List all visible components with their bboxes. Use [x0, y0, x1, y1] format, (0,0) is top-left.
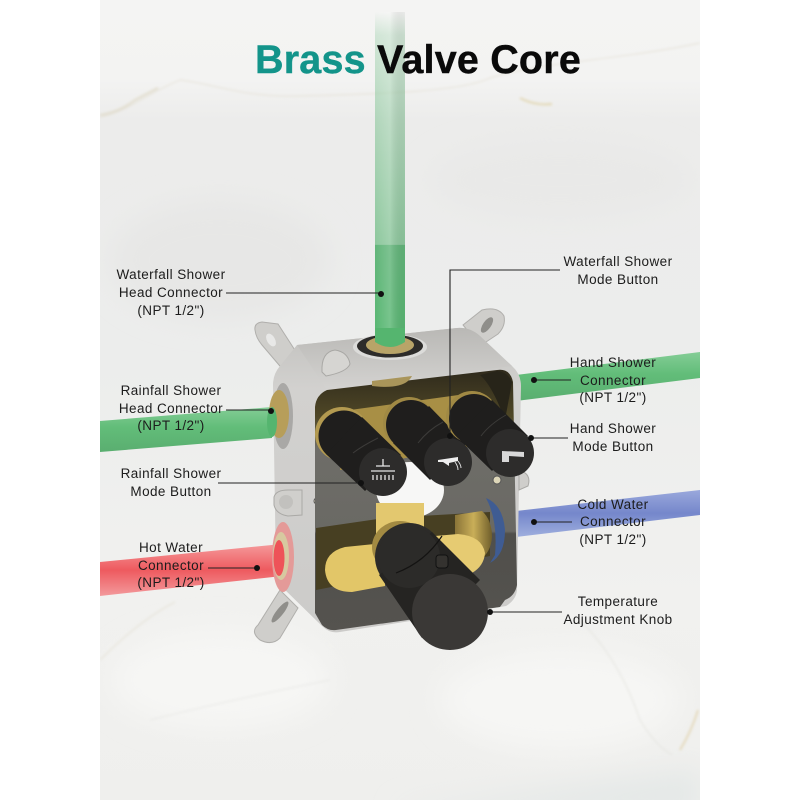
callout: hand shower mode button: Mode Button: [572, 439, 654, 454]
valve box: [254, 309, 534, 650]
white opening: [376, 462, 444, 518]
blue pipe: cold water: [516, 490, 700, 537]
callout: hot water connector: (NPT 1/2"): [137, 575, 205, 590]
callout: rainfall shower head connector: Head Connector: [119, 401, 223, 416]
callout: rainfall shower mode button: Rainfall Shower: [121, 466, 222, 481]
callout: waterfall shower head connector: [116, 267, 384, 318]
callout: waterfall shower mode button: Mode Button: [577, 272, 659, 287]
title: Brass Valve Core: [255, 38, 581, 82]
callout: temperature adjustment knob: Temperature: [578, 594, 658, 609]
callout: hand shower connector: Hand Shower: [570, 355, 656, 370]
red pipe: hot water: [100, 544, 282, 596]
knob: temperature adjustment: [375, 523, 488, 650]
callout: hand shower connector: (NPT 1/2"): [579, 390, 647, 405]
box shell: [273, 328, 521, 632]
callout: cold water connector: [531, 497, 649, 547]
callout: rainfall shower mode button: Mode Button: [130, 484, 212, 499]
callout: hot water connector: Connector: [138, 558, 204, 573]
brass back plate: [340, 392, 505, 470]
callout: hand shower connector: [531, 355, 656, 405]
callout: waterfall shower head connector: Head Connector: [119, 285, 223, 300]
callout: hand shower mode button: Hand Shower: [570, 421, 656, 436]
callout: cold water connector: Connector: [580, 514, 646, 529]
mounting brackets: [254, 309, 504, 643]
brass valve body: [316, 498, 505, 592]
callout: hand shower mode button: [528, 421, 656, 454]
callout: cold water connector: (NPT 1/2"): [579, 532, 647, 547]
top lug: [322, 350, 350, 376]
callout: waterfall shower mode button: Waterfall Shower: [563, 254, 673, 269]
callout: waterfall shower mode button: [447, 254, 673, 439]
callout: waterfall shower head connector: Waterfall Shower: [116, 267, 226, 282]
green pipe: hand shower: [516, 352, 700, 401]
top connector ring: [353, 328, 427, 360]
button: rainfall shower mode: [315, 407, 407, 496]
small lug left lower: [274, 490, 320, 516]
callout: rainfall shower head connector: [119, 383, 274, 433]
marble background: [100, 0, 700, 800]
cavity: [315, 370, 517, 630]
callout: cold water connector: Cold Water: [577, 497, 649, 512]
callout: hand shower connector: Connector: [580, 373, 646, 388]
callout: hot water connector: Hot Water: [139, 540, 203, 555]
callout: rainfall shower head connector: Rainfall Shower: [121, 383, 222, 398]
button: waterfall shower mode: [383, 397, 472, 486]
callout: rainfall shower mode button: [121, 466, 364, 499]
screws: [493, 476, 501, 484]
button: hand shower mode: [446, 391, 534, 477]
callout: waterfall shower head connector: (NPT 1/2"): [137, 303, 205, 318]
green vertical pipe: waterfall shower head: [375, 12, 405, 342]
callout: rainfall shower head connector: (NPT 1/2"): [137, 418, 205, 433]
callout: hot water connector: [137, 540, 260, 590]
callout: temperature adjustment knob: Adjustment Knob: [563, 612, 673, 627]
hot water port: [272, 522, 294, 592]
callout: temperature adjustment knob: [487, 594, 673, 627]
green pipe: rainfall shower head: [100, 407, 272, 452]
left connector port: [267, 383, 293, 449]
